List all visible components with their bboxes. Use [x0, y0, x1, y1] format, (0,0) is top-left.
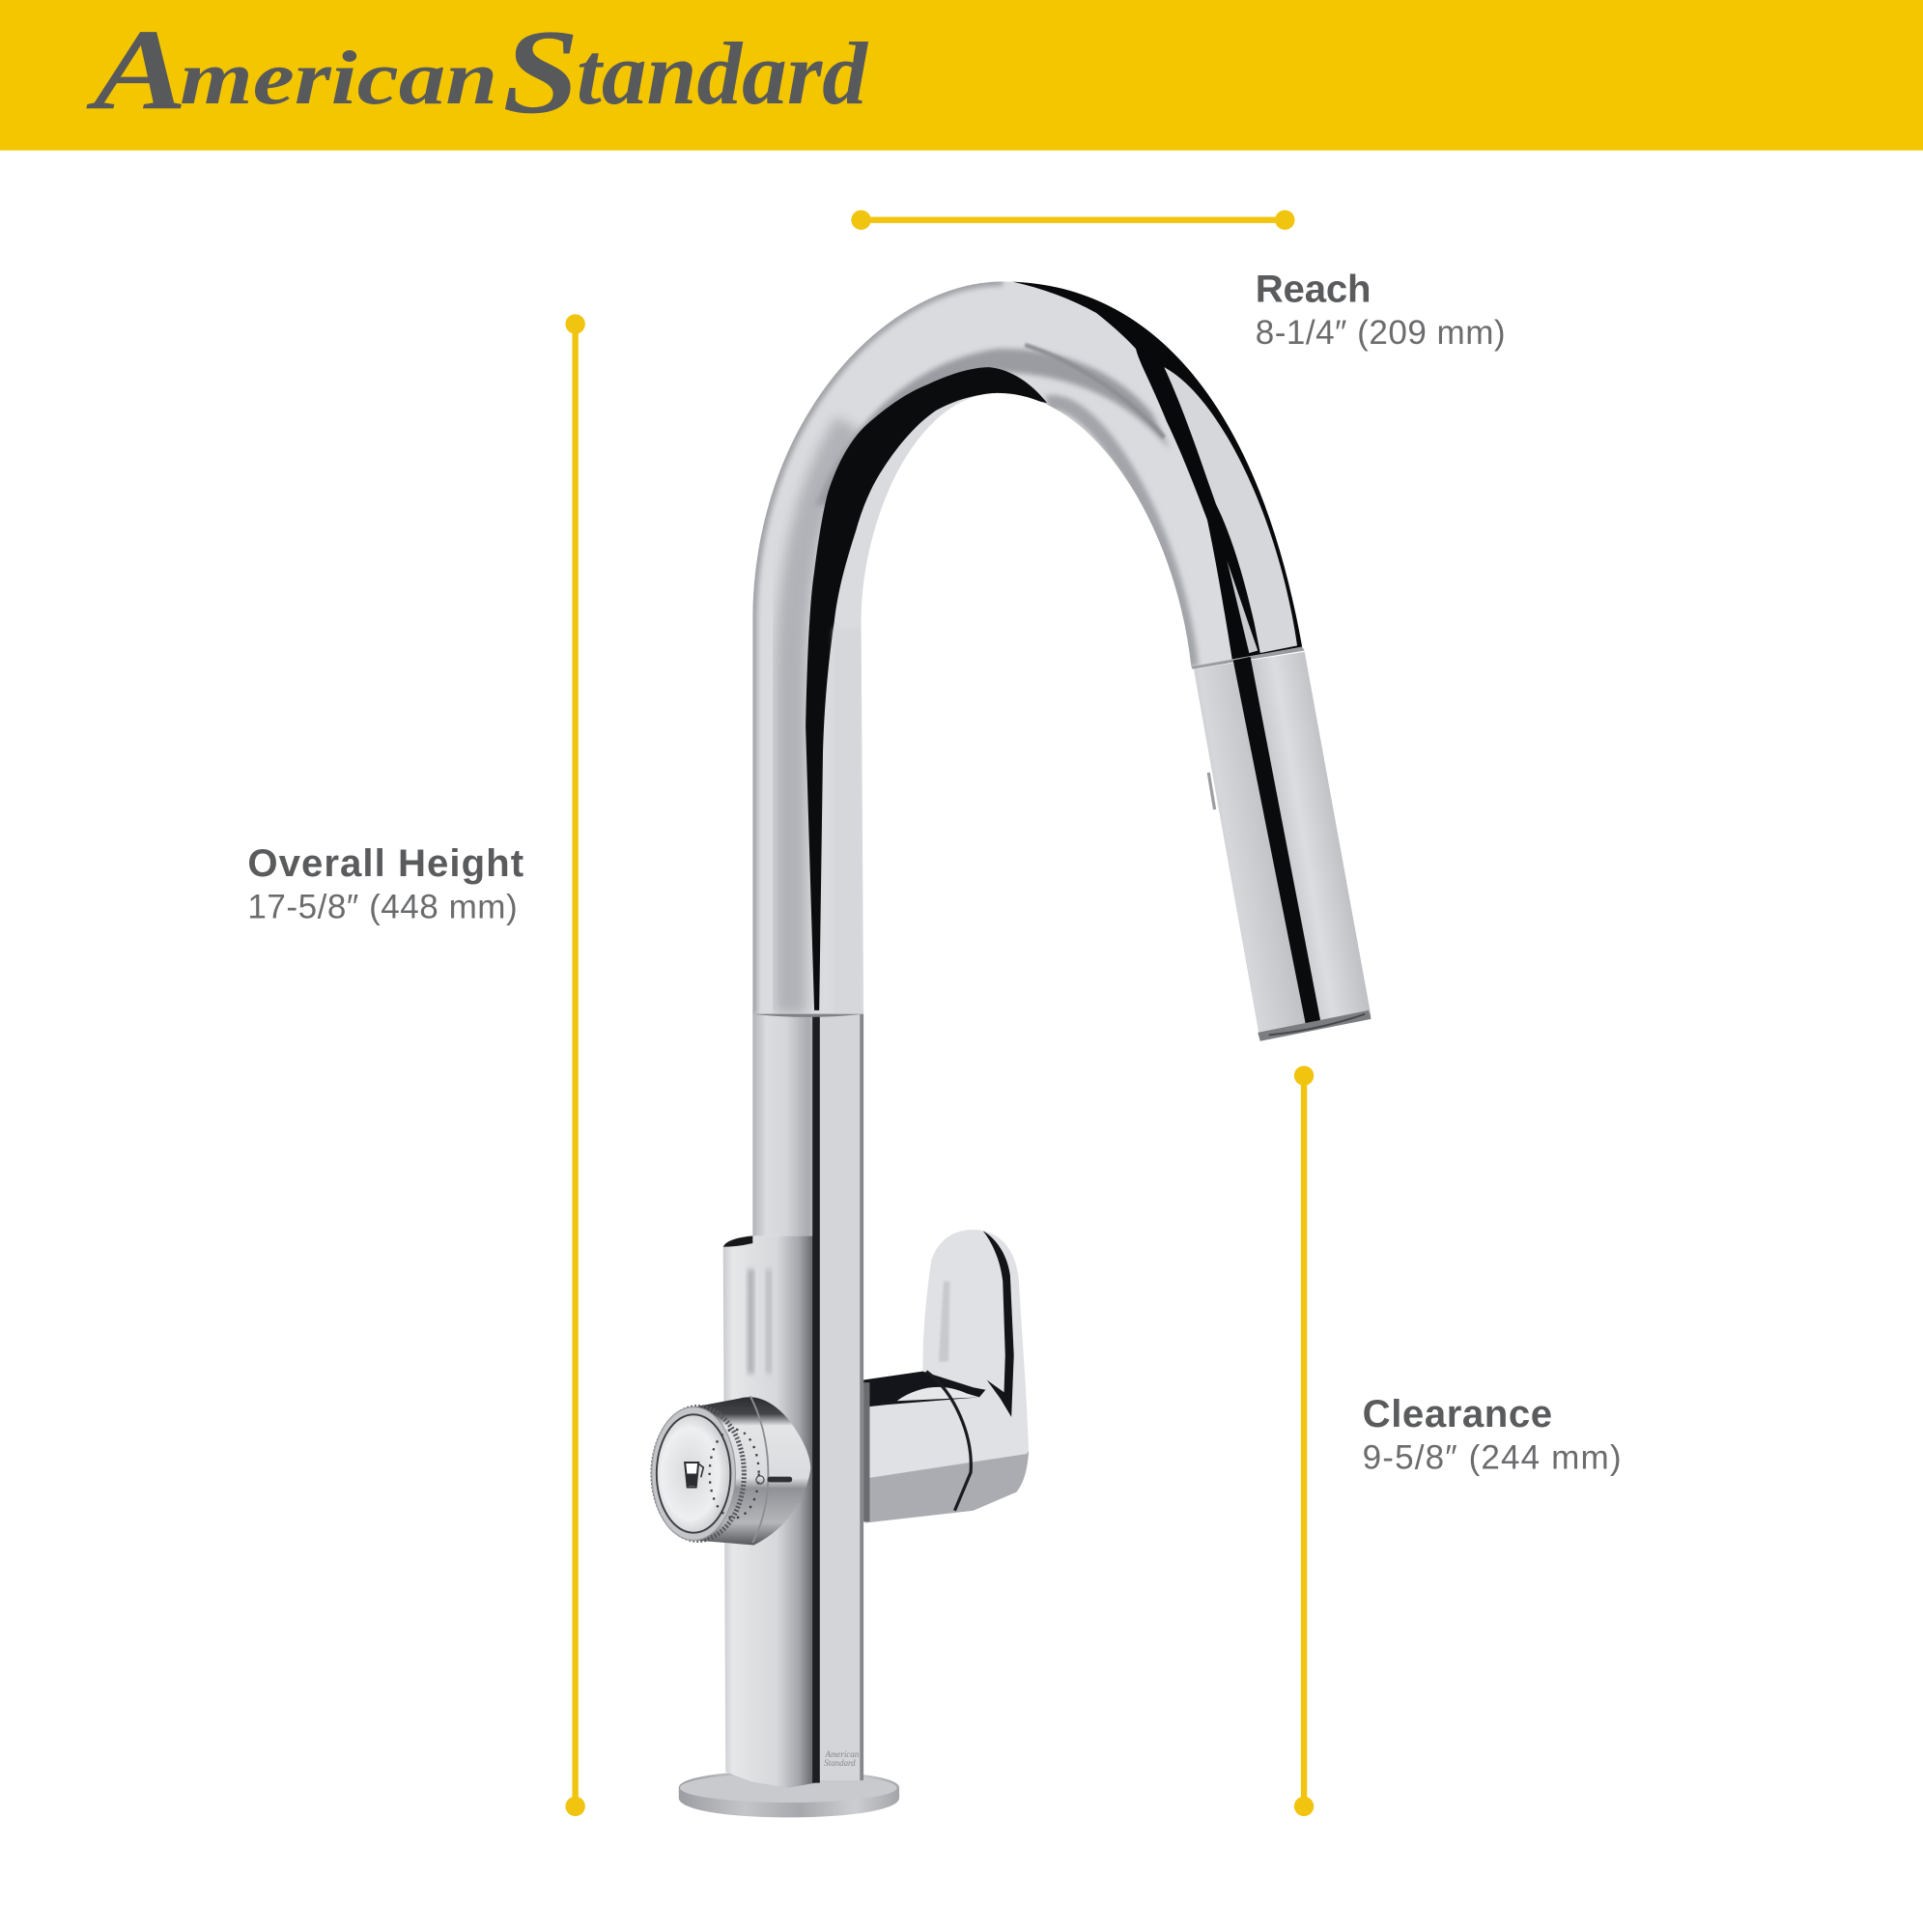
American Standard logo: tandard	[577, 24, 869, 123]
reach dimension line	[851, 211, 1295, 230]
American Standard logo: S	[502, 6, 579, 139]
power symbol and indicator	[756, 1476, 792, 1484]
light lower neck side	[834, 629, 863, 1016]
small etched logo on column: American	[825, 1749, 860, 1759]
overall height label: 17-5/8″ (448 mm)	[247, 888, 518, 925]
clearance dimension line	[1294, 1065, 1314, 1816]
flow control dial	[652, 1396, 810, 1545]
overall height dimension line	[565, 314, 585, 1816]
clearance label	[1363, 1392, 1622, 1476]
lever handle	[863, 1230, 1029, 1523]
overall height label: Overall Height	[247, 841, 523, 885]
lower main column	[752, 1010, 863, 1783]
American Standard logo: merican	[180, 37, 497, 121]
American Standard logo	[85, 5, 869, 139]
small etched logo on column	[824, 1749, 860, 1768]
thin grey crease	[1025, 345, 1164, 438]
reach label: Reach	[1256, 268, 1372, 311]
upper neck and gooseneck arc	[739, 271, 1318, 1023]
overall height label	[247, 841, 523, 925]
clearance label: 9-5/8″ (244 mm)	[1363, 1438, 1622, 1476]
icon: measuring cup	[685, 1463, 703, 1488]
light highlight on outer right bend	[1164, 367, 1297, 653]
rear body column	[723, 1236, 815, 1788]
faucet	[652, 271, 1372, 1817]
small etched logo on column: Standard	[824, 1758, 856, 1768]
American Standard logo: A	[85, 5, 187, 133]
header banner	[0, 0, 1923, 151]
reach label: 8-1/4″ (209 mm)	[1256, 314, 1506, 352]
faucet base plate	[679, 1771, 899, 1817]
black inner reflection	[806, 367, 1047, 1010]
clearance label: Clearance	[1363, 1392, 1552, 1435]
mid grey ring around inner bend	[815, 349, 1171, 505]
black band and outer rim on right bend	[1012, 282, 1302, 659]
neck left shading	[791, 425, 850, 1014]
reach label	[1256, 268, 1506, 352]
pull-down spray head	[1191, 647, 1372, 1041]
